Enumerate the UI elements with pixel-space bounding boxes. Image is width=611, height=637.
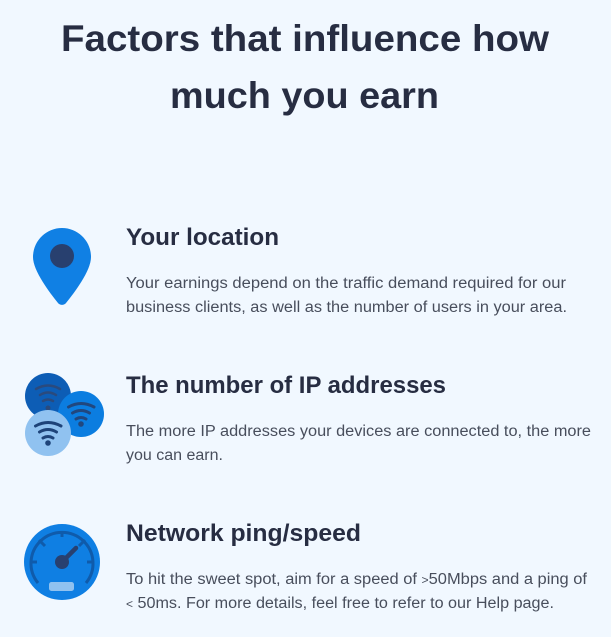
text: IP addresses description [126, 423, 591, 464]
icon: wifi circles [25, 373, 104, 456]
text: IP addresses description: The more IP addresses your devices are connected to, the more [126, 423, 591, 440]
icon: blue wifi circle [58, 391, 104, 437]
title [61, 18, 549, 116]
text: network ping description: To hit the sweet spot, aim for a speed of >50Mbps and a ping of [126, 571, 588, 588]
text: network ping description: < 50ms. For more details, feel free to refer to our Help page. [126, 595, 554, 612]
heading: your location: Your location [126, 224, 279, 251]
title: Factors that influence how [61, 18, 549, 59]
text: your location description: Your earnings depend on the traffic demand required for our [126, 275, 566, 292]
heading: number of IP addresses: The number of IP addresses [126, 372, 446, 399]
icon: light wifi circle [25, 410, 71, 456]
text: your location description [126, 275, 567, 316]
icon: dark wifi circle [25, 373, 71, 419]
text: IP addresses description: you can earn. [126, 447, 223, 464]
text: your location description: business clients, as well as the number of users in your area. [126, 299, 567, 316]
text: network ping description [126, 571, 588, 612]
icon: speed gauge [24, 524, 100, 600]
heading: network ping/speed: Network ping/speed [126, 520, 361, 547]
title: much you earn [170, 75, 439, 116]
icon: location pin [33, 228, 91, 305]
